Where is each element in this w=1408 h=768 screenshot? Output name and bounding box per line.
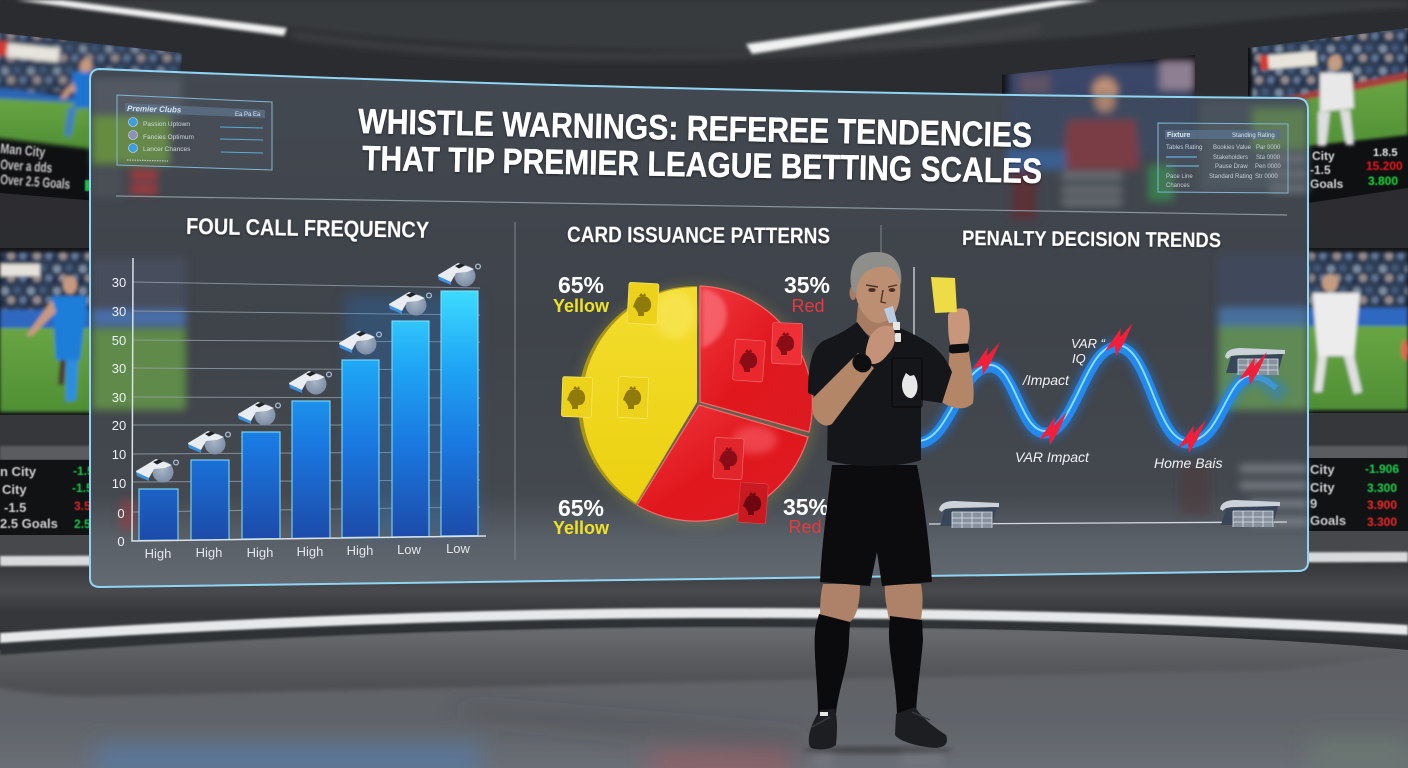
- base line: [929, 522, 1287, 524]
- skirting tier: [0, 560, 1408, 630]
- trend labels: IQ: [1072, 351, 1086, 366]
- mini table: top right: Tables Rating: [1166, 145, 1202, 151]
- player in white: [1312, 274, 1362, 394]
- x axis labels: High: [297, 544, 323, 559]
- pie label: 35% red top: Red: [791, 296, 825, 316]
- ticker text: [0, 140, 92, 192]
- y axis labels: 30: [112, 361, 126, 376]
- x axis labels: High: [247, 545, 273, 560]
- heading: foul call frequency: FOUL CALL FREQUENCY: [186, 213, 429, 243]
- x axis labels: High: [196, 545, 222, 560]
- stadium icons: [939, 348, 1285, 528]
- premier league badge: [902, 373, 918, 398]
- y axis labels: 30: [112, 304, 126, 319]
- ticker: mid right odds: City: [1310, 462, 1335, 477]
- y axis labels: [112, 275, 126, 549]
- screen: top right broadcast: 15.200: [1366, 159, 1403, 173]
- y axis labels: 0: [117, 534, 125, 549]
- glow: [577, 285, 817, 525]
- mini table: top right: Stakeholders: [1213, 155, 1248, 161]
- yellow slice: [582, 287, 697, 503]
- foul bolts: [972, 323, 1267, 453]
- red highlight: [702, 289, 727, 348]
- head: [853, 259, 900, 323]
- ring shadow: [0, 616, 1408, 655]
- player in blue: [60, 59, 96, 136]
- ticker: mid left odds: [0, 460, 94, 535]
- pie label: 65% yellow bottom: 65%: [558, 495, 604, 521]
- pie label: 35% red bottom: 35%: [783, 494, 829, 520]
- y axis labels: 50: [112, 333, 126, 348]
- mini table: top left: Premier Clubs: [127, 104, 182, 115]
- mini table: top right: Fixture: [1167, 132, 1190, 139]
- red cards: [713, 322, 803, 524]
- ticker: mid left odds: -1.5: [73, 464, 94, 478]
- ticker: mid left odds: -1.5: [4, 500, 26, 515]
- title: WHISTLE WARNINGS: REFEREE TENDENCIES: [358, 102, 1032, 155]
- wave highlight: [918, 345, 1253, 441]
- ticker: mid right odds: Goals: [1310, 513, 1346, 528]
- bars: [139, 291, 478, 540]
- ceiling light left: [16, 0, 287, 36]
- wrist watch left: [849, 350, 875, 376]
- heading: penalty decision trends: PENALTY DECISION TRENDS: [962, 227, 1221, 252]
- ticker: mid right odds: -1.906: [1365, 462, 1399, 476]
- face details: [866, 285, 897, 303]
- wave tail: [1253, 377, 1276, 388]
- y axis labels: 10: [112, 447, 126, 462]
- ticker text: Man City: [0, 140, 46, 160]
- mini table: top left: Fancies Optimum: [143, 134, 194, 141]
- player in blue: [26, 276, 88, 402]
- mini table: top right: Chances: [1166, 183, 1190, 189]
- ceiling: [0, 0, 1408, 50]
- boot reflections: [812, 750, 942, 768]
- trend labels: VAR “: [1071, 336, 1106, 351]
- pie label: 35% red bottom: Red: [788, 517, 822, 537]
- ticker: mid right odds: 3.300: [1367, 481, 1397, 495]
- mini table: top right: Standing Rating: [1232, 133, 1275, 139]
- red slice lower: [637, 405, 808, 521]
- ticker: mid right odds: 9: [1310, 496, 1317, 511]
- x axis labels: Low: [397, 542, 422, 557]
- ticker: mid left odds: City: [2, 482, 27, 497]
- mini table: top left: Ea Pa Ea: [235, 112, 261, 118]
- wave line: [918, 347, 1253, 443]
- yellow slice edge: [578, 286, 697, 505]
- heading: card issuance patterns: CARD ISSUANCE PATTERNS: [567, 222, 830, 248]
- ticker: mid left odds: -1.5: [72, 481, 93, 495]
- scoreboard: [7, 43, 60, 62]
- trend labels: /Impact: [1022, 372, 1070, 388]
- pie label: 65% yellow top: 65%: [558, 272, 604, 298]
- yellow cards: [561, 282, 659, 419]
- ceiling light right: [746, 0, 1098, 54]
- pie label: 35% red bottom: [783, 494, 829, 537]
- screen: top left match broadcast: [0, 33, 182, 200]
- pie label: 65% yellow top: [553, 272, 610, 316]
- shirt pocket: [892, 358, 922, 407]
- x axis labels: Low: [446, 541, 471, 556]
- neck: [856, 305, 895, 340]
- screen: top right broadcast: City: [1312, 149, 1335, 163]
- y axis labels: 0: [117, 506, 125, 521]
- mini table: top right: Standard Rating: [1209, 174, 1252, 180]
- ticker: mid right odds: 3.300: [1367, 515, 1397, 529]
- mini table: top right: Pace Line: [1166, 174, 1193, 180]
- screen: top right broadcast: Goals: [1310, 177, 1344, 191]
- shirt: [808, 322, 952, 466]
- screen: top right broadcast: -1.5: [1310, 163, 1331, 177]
- axes: [132, 258, 486, 541]
- y axis labels: 30: [112, 275, 126, 290]
- boots: [809, 707, 947, 749]
- screen: top right broadcast: 3.800: [1368, 174, 1398, 188]
- mini table: top right: Sta 0000: [1256, 155, 1281, 161]
- yellow card: [931, 277, 957, 313]
- ticker: mid right odds: 3.900: [1367, 498, 1397, 512]
- lower red highlight: [733, 426, 777, 454]
- ticker: mid left odds: 2.5 Goals: [0, 516, 58, 531]
- screen: top right broadcast: 1.8.5: [1373, 147, 1397, 159]
- bar chart: foul call frequency: [112, 258, 486, 561]
- raised hand: [948, 308, 970, 347]
- panel edge: [90, 69, 1308, 587]
- trend labels: VAR Impact: [1015, 449, 1090, 465]
- referee: [803, 252, 974, 768]
- yellow highlight: [655, 291, 695, 339]
- red slice upper: [700, 286, 812, 432]
- right arm skin: [942, 347, 974, 408]
- mini table: top right: Bookies Value: [1213, 145, 1252, 151]
- line chart: penalty decision trends: [918, 323, 1287, 528]
- legs: [820, 584, 923, 622]
- skirting light strip: [0, 552, 1408, 566]
- floor reflections: [95, 706, 1408, 768]
- ticker: mid left odds: 3.5: [74, 499, 91, 513]
- pie label: 65% yellow bottom: Yellow: [553, 518, 610, 538]
- bar glow: [345, 295, 480, 535]
- mouth whistle: [884, 306, 897, 323]
- pie label: 35% red top: [784, 272, 830, 316]
- ticker text: Over 2.5 Goals: [0, 171, 71, 192]
- ghosted screens seen through glass: [92, 78, 1308, 530]
- glass infographic panel: [90, 69, 1308, 587]
- mini table: top right: Pause Draw: [1215, 164, 1248, 170]
- player in white: [1318, 55, 1354, 146]
- floor shadow: [803, 746, 953, 754]
- mini table: top left: Passion Uptown: [143, 121, 190, 128]
- y axis labels: 10: [112, 476, 126, 491]
- title: [358, 102, 1042, 191]
- mini table: top right: [1158, 123, 1288, 193]
- ticker: mid left odds: 2.5: [74, 517, 91, 531]
- stage light ring: [0, 608, 1408, 643]
- grid lines: [133, 282, 480, 512]
- mini table: top right: Str 0000: [1255, 174, 1278, 180]
- pie label: 65% yellow top: Yellow: [553, 296, 610, 316]
- x axis labels: [145, 541, 471, 561]
- hair: [851, 252, 901, 294]
- mini table: top right: Par 0000: [1256, 145, 1281, 151]
- title: THAT TIP PREMIER LEAGUE BETTING SCALES: [362, 139, 1042, 191]
- whistle icons: [136, 263, 480, 482]
- ceiling cove arc: [290, 28, 1040, 56]
- screen: mid left broadcast: [0, 248, 92, 415]
- wrist watch right: [949, 343, 969, 354]
- ticker: mid right odds: City: [1310, 480, 1335, 495]
- ticker text: Over a dds: [0, 156, 53, 176]
- wave glow: [918, 347, 1283, 443]
- screen: top centre broadcast: [1002, 55, 1195, 96]
- screen: top right broadcast: [1248, 28, 1408, 203]
- mini table: top left: Lancer Chances: [143, 146, 191, 153]
- stage floor dome: [0, 626, 1408, 768]
- lower wall band: [0, 412, 1408, 460]
- panel glass: [90, 69, 1308, 587]
- x axis labels: High: [145, 546, 171, 561]
- mini table: top left: [117, 95, 272, 170]
- y axis labels: 20: [112, 418, 126, 433]
- socks: [815, 614, 923, 714]
- pie label: 35% red top: 35%: [784, 272, 830, 298]
- pie label: 65% yellow bottom: [553, 495, 610, 538]
- pie chart: card issuance: [561, 282, 817, 525]
- stage floor: [0, 650, 1408, 768]
- ticker: mid left odds: n City: [0, 464, 37, 479]
- mini table: top right: Pen 0000: [1255, 164, 1281, 170]
- trend labels: [1015, 336, 1222, 471]
- y axis labels: 30: [112, 390, 126, 405]
- fist: [866, 325, 895, 364]
- trend labels: Home Bais: [1154, 455, 1222, 471]
- ticker: mid right odds: [1308, 458, 1408, 531]
- ear: [850, 286, 856, 300]
- forearm: [812, 353, 874, 426]
- shorts: [820, 465, 932, 586]
- screen: mid right broadcast: [1305, 248, 1408, 413]
- x axis labels: High: [347, 543, 373, 558]
